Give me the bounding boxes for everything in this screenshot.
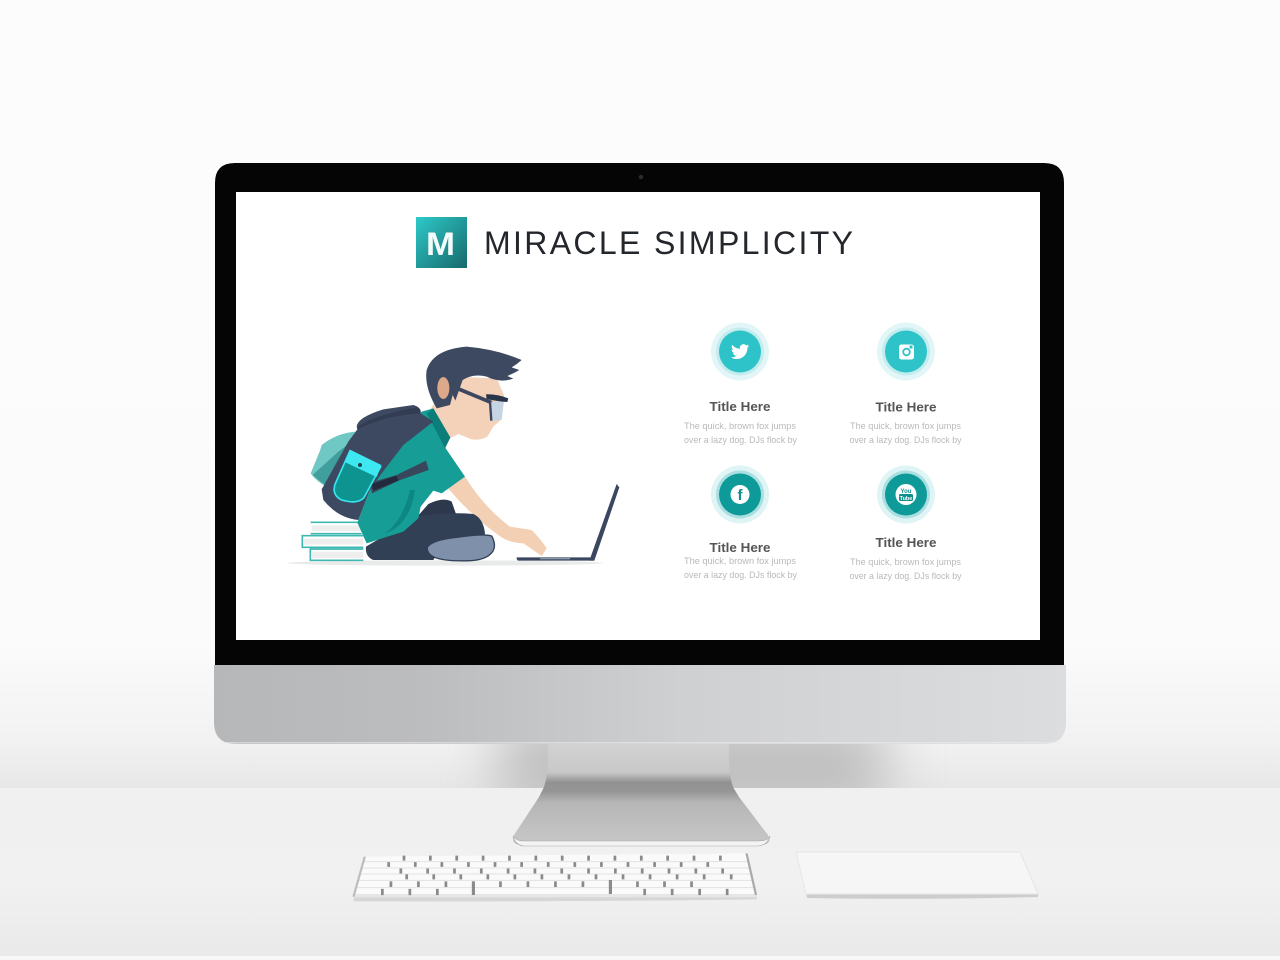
illustration: student with backpack and laptop — [287, 347, 619, 566]
slide heading — [416, 217, 853, 268]
shirt — [357, 408, 465, 543]
icon: youtube: Tube — [900, 496, 912, 502]
item description: The quick, brown fox jumps — [850, 421, 961, 432]
tucked knee behind leg — [417, 500, 456, 521]
item description — [684, 421, 797, 446]
backpack body — [322, 405, 433, 520]
arm and hand — [447, 477, 547, 556]
social item: twitter — [684, 322, 797, 446]
backpack pocket — [334, 450, 381, 502]
item title: Title Here — [710, 540, 770, 555]
icon: facebook: f — [738, 487, 744, 504]
trackpad — [796, 852, 1038, 899]
monitor — [214, 163, 1066, 744]
item description: The quick, brown fox jumps — [684, 421, 796, 432]
monitor stand — [513, 744, 770, 846]
logo mark: M — [426, 226, 455, 262]
backpack strap — [370, 461, 429, 493]
icon: youtube: You — [901, 489, 912, 495]
item description: over a lazy dog. DJs flock by — [850, 435, 962, 446]
stack of books — [302, 522, 363, 560]
foot — [427, 535, 494, 561]
monitor bezel — [215, 163, 1064, 665]
item description — [850, 421, 962, 446]
webcam — [639, 175, 643, 179]
slide screen — [236, 192, 1040, 640]
icon: instagram — [877, 322, 935, 380]
item description: The quick, brown fox jumps — [850, 557, 961, 568]
item description — [850, 557, 962, 582]
social item: instagram — [850, 322, 962, 446]
ear — [437, 377, 449, 399]
item title: Title Here — [876, 400, 936, 414]
head — [426, 347, 522, 440]
keyboard — [354, 853, 757, 901]
logo mark — [416, 217, 467, 268]
item description: The quick, brown fox jumps — [684, 556, 796, 567]
monitor aluminium chin — [214, 665, 1066, 744]
hair — [426, 347, 522, 408]
icon: youtube — [877, 466, 935, 524]
item title: Title Here — [876, 535, 936, 550]
floor shadow — [287, 560, 603, 566]
item description: over a lazy dog. DJs flock by — [684, 570, 797, 581]
icon: twitter — [711, 322, 769, 380]
title text: MIRACLE SIMPLICITY — [484, 225, 853, 261]
leg — [366, 513, 485, 560]
glasses — [459, 389, 508, 421]
laptop — [517, 484, 619, 561]
item title: Title Here — [710, 399, 770, 414]
neck and face — [430, 377, 504, 440]
backpack rear pouch — [311, 432, 357, 487]
social item: facebook — [684, 466, 797, 581]
social item: youtube — [850, 466, 962, 582]
item description: over a lazy dog. DJs flock by — [850, 571, 962, 582]
item description — [684, 556, 797, 581]
item description: over a lazy dog. DJs flock by — [684, 435, 797, 446]
